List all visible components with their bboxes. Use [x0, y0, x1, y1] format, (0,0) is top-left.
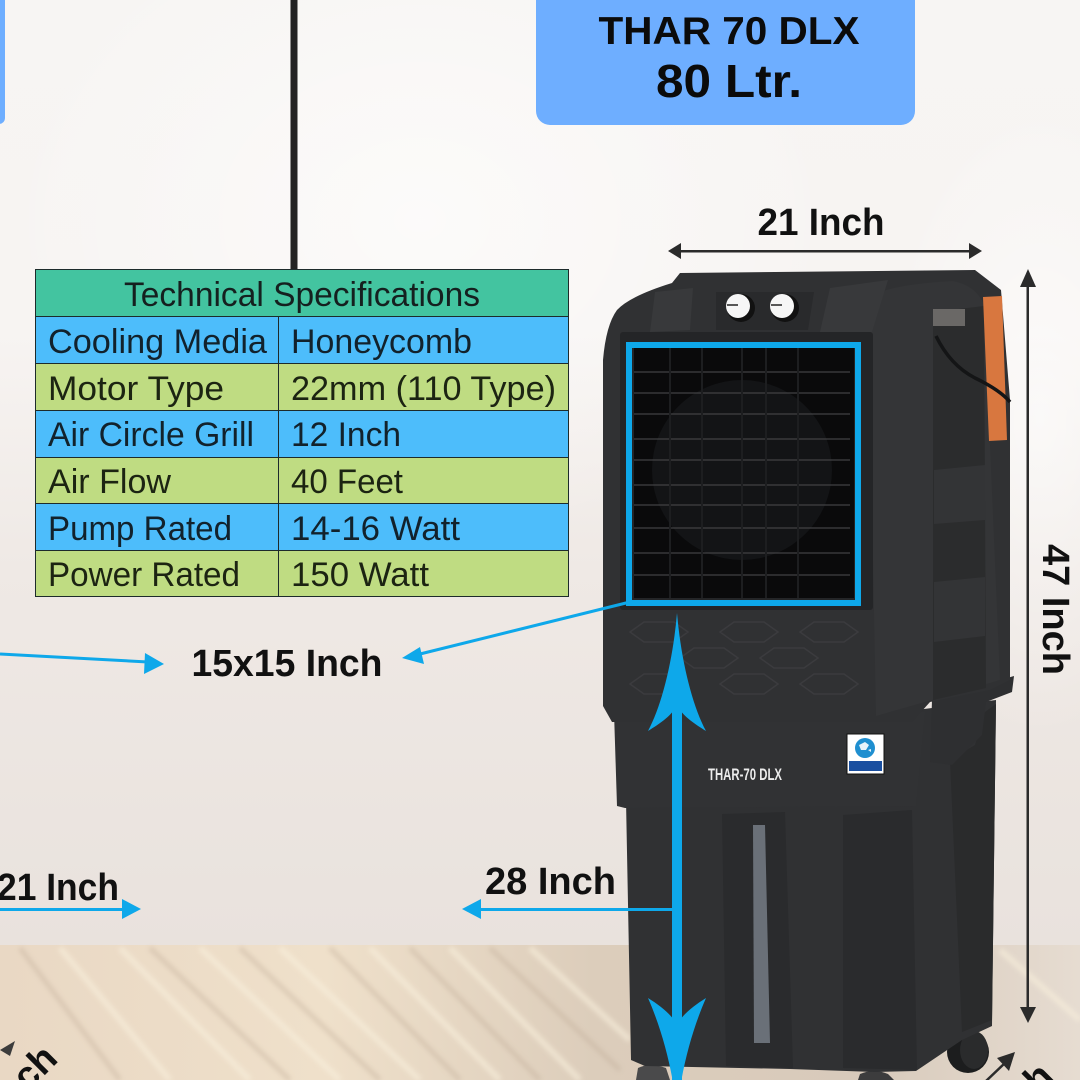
overall height arrow with label: 47 Inch [1034, 544, 1076, 675]
cooler upper body [603, 270, 1010, 722]
table header: Technical Specifications [124, 276, 480, 314]
row: motor type [36, 364, 568, 410]
row: air circle grill [36, 410, 568, 458]
row: air circle grill: 12 Inch [291, 416, 401, 454]
row: power rated: Power Rated [48, 556, 240, 594]
blue height arrow [648, 613, 706, 1080]
row: power rated: 150 Watt [291, 556, 430, 594]
row: air circle grill: Air Circle Grill [48, 416, 254, 454]
row: power rated [36, 550, 568, 596]
row: air flow [36, 458, 568, 504]
row: air flow: 40 Feet [291, 463, 404, 501]
row: pump rated [36, 504, 568, 550]
28 inch label with arrow: 28 Inch [485, 861, 616, 903]
title box: 80 Ltr. [656, 55, 802, 107]
title box [536, 0, 915, 125]
row: cooling media [36, 316, 568, 364]
row: cooling media: Honeycomb [291, 323, 472, 361]
title box: THAR 70 DLX [598, 10, 860, 53]
cooler tank lower body [614, 676, 1014, 1072]
blue grill outline [629, 345, 858, 603]
row: pump rated: 14-16 Watt [291, 510, 461, 548]
control knobs [726, 294, 799, 322]
row: motor type: 22mm (110 Type) [291, 370, 556, 408]
cooler wheels [636, 1031, 989, 1080]
certification badge [847, 734, 884, 774]
grill size label with arrows [0, 602, 630, 685]
table header [36, 270, 568, 316]
grill size label with arrows: 15x15 Inch [192, 643, 382, 685]
model name on tank: THAR-70 DLX [708, 765, 782, 784]
warning label [983, 296, 1007, 441]
28 inch label with arrow [462, 861, 674, 919]
row: motor type: Motor Type [48, 370, 224, 408]
technical specifications table [36, 270, 568, 596]
power cable [936, 336, 1010, 402]
left width label with arrow: 21 Inch [0, 867, 119, 909]
top width arrow with label: 21 Inch [758, 202, 884, 244]
overall height arrow with label [1020, 269, 1076, 1023]
wooden floor [0, 945, 1080, 1080]
front grill [620, 332, 873, 610]
row: air flow: Air Flow [48, 463, 171, 501]
row: pump rated: Pump Rated [48, 510, 232, 548]
honeycomb panel [630, 622, 858, 694]
top width arrow with label [668, 202, 982, 259]
left title box fragment [0, 0, 5, 124]
black hanging line [290, 0, 298, 270]
row: cooling media: Cooling Media [48, 323, 267, 361]
air cooler product [603, 270, 1014, 1080]
